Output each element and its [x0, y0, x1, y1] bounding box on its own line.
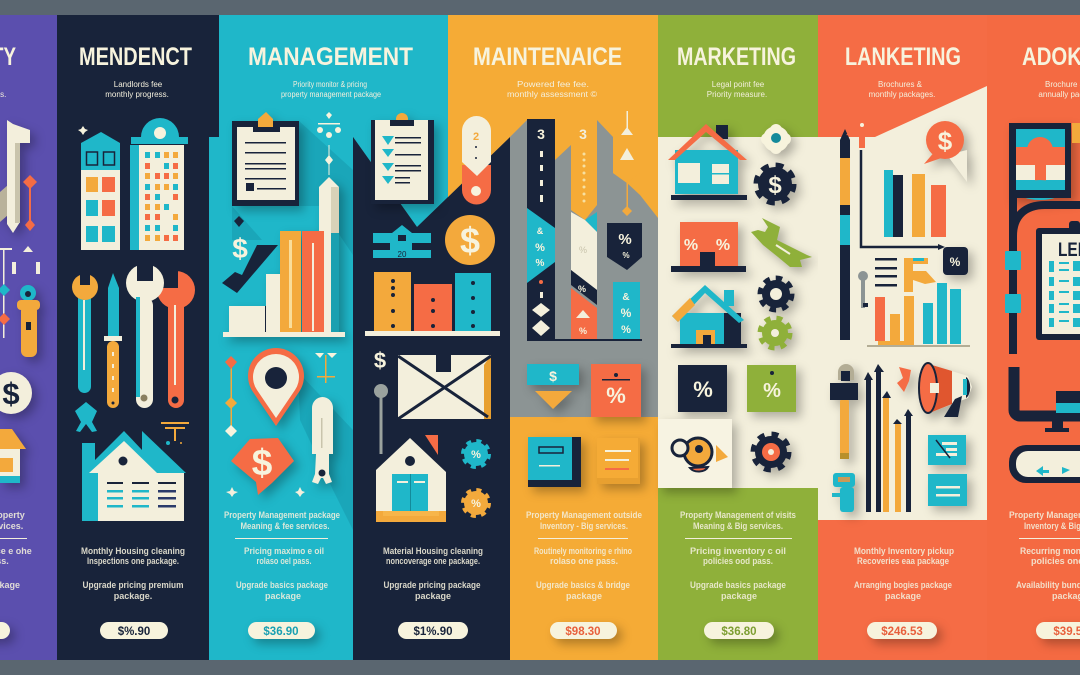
panel: mendenct: [57, 15, 219, 660]
icon: teal gear: [463, 441, 489, 467]
subtext: mendenct: Landlords fee: [114, 80, 163, 89]
price pill: marketing: $36.80: [721, 626, 757, 638]
icon: pencil: [840, 129, 850, 340]
icon: cream card: [658, 419, 732, 488]
icon: right strip: [607, 111, 642, 340]
icon: percent box: %: [606, 383, 626, 408]
icon: right strip: %: [621, 324, 631, 336]
icon: dollar gear: [756, 165, 794, 203]
icon: navy diamond: [234, 216, 244, 227]
heading: management: MANAGEMENT: [248, 43, 413, 71]
icon: navy strip: &: [537, 226, 544, 236]
subtext: lanketing: monthly packages.: [869, 90, 935, 99]
icon: teal tool: [832, 473, 855, 512]
icon: pointer tag: [462, 116, 491, 204]
subtext: adok: [1038, 80, 1080, 99]
subtext: mendenct: [105, 80, 169, 99]
icon: yellow folder: [597, 438, 640, 484]
icon: text lines: [875, 258, 897, 286]
price pill: navy column: $1%.90: [413, 626, 453, 638]
text: maintenance body: rolaso one pass.: [550, 556, 618, 566]
background: cream zone: [658, 137, 818, 488]
icon: teal tag: [527, 364, 579, 409]
icon: map pin: [248, 348, 304, 426]
text: purple column body: [0, 510, 32, 590]
icon: house with door: [376, 435, 446, 522]
icon: teal card upper: [928, 435, 966, 465]
icon: envelope: [398, 355, 491, 419]
icon: clipboard: [232, 112, 299, 206]
icon: dollar coin: $: [2, 376, 20, 411]
icon: key: [0, 120, 30, 233]
icon: teal bank: 20: [398, 250, 407, 259]
text: management body: Pricing maximo e oil: [244, 546, 324, 556]
text: navy body: package: [415, 591, 451, 601]
icon: yellow sign: [161, 422, 189, 445]
text: lanketing body: Arranging bogies package: [854, 580, 952, 590]
text: maintenance body: package: [566, 591, 602, 601]
text: navy body: noncoverage one package.: [386, 556, 480, 566]
icon: green percent tag: [747, 365, 796, 412]
text: maintenance body: [526, 510, 642, 601]
icon: dollar coin: $: [460, 220, 480, 261]
bottom band: [0, 660, 1080, 675]
icon: teal gear: %: [471, 449, 481, 461]
text: management body: Meaning & fee services.: [240, 521, 330, 531]
text: maintenance body: Property Management outside: [526, 510, 642, 520]
price pill: adok: [1036, 622, 1080, 639]
icon: arrows chart: [864, 364, 913, 512]
text: maintenance body: Routinely monitoring e rhino: [534, 546, 632, 556]
subtext: lanketing: Brochures &: [878, 80, 923, 89]
icon: house one: [668, 124, 747, 200]
icon: house three: [671, 285, 747, 348]
subtext: management: Priority monitor & pricing: [293, 80, 367, 89]
icon: dotted line: [0, 246, 40, 338]
bar chart: tower and bars: [223, 177, 345, 337]
subtext: maintenance: [507, 80, 597, 99]
icon: middle strip: %: [579, 326, 587, 336]
price pill: mendenct: $%.90: [118, 626, 150, 638]
icon: right strip: &: [622, 292, 630, 303]
icon: diamond line: [225, 356, 237, 437]
icon: white flower gear: [761, 124, 791, 154]
text: marketing body: Pricing inventory c oil: [690, 546, 786, 556]
icon: navy strip: [527, 119, 555, 340]
icon: percent house: %: [684, 237, 698, 254]
icon: percent house: %: [716, 237, 730, 254]
price pill: management: [248, 622, 315, 639]
icon: yellow tool: [17, 285, 40, 357]
icon: percent house: [671, 222, 746, 272]
icon: hammer: [830, 364, 858, 459]
icon: middle strip: %: [578, 284, 586, 294]
base line: [527, 339, 642, 341]
icon: percent square: %: [950, 255, 961, 269]
icon: dollar pin: $: [374, 348, 386, 373]
text: marketing body: package: [721, 591, 757, 601]
text: marketing body: Upgrade basics package: [690, 580, 786, 590]
icon: teal emblem: [75, 402, 97, 432]
long shadows: management: [232, 121, 353, 530]
panel: maintenance: [448, 15, 658, 660]
icon: house: [0, 429, 26, 483]
panel: navy column with envelope: [353, 113, 510, 660]
text: navy body: [383, 546, 483, 601]
icon: dollar sign: $: [232, 233, 248, 264]
bar chart: three bars: [365, 272, 500, 336]
icon: yellow-teal wrench: [72, 274, 98, 393]
icon: tall building: [130, 118, 188, 250]
icon: right strip: %: [621, 306, 632, 320]
subtext: marketing: Legal point fee: [712, 80, 765, 89]
text: management body: Property Management package: [224, 510, 340, 520]
icon: pointer tag: 2: [473, 131, 479, 143]
icon: right strip: %: [618, 231, 632, 248]
icon: teal tag: $: [549, 368, 557, 384]
text: navy body: Upgrade pricing package: [384, 580, 480, 590]
price pill: management: $36.90: [263, 626, 299, 638]
text: lanketing body: [854, 546, 954, 601]
price pill: mendenct: [100, 622, 168, 639]
subtext: lanketing: [869, 80, 935, 99]
subtext: marketing: [707, 80, 767, 99]
text: navy body: Material Housing cleaning: [383, 546, 483, 556]
text: lanketing body: package: [885, 591, 921, 601]
text: mendenct body: [81, 546, 185, 601]
heading: maintenance: MAINTENAICE: [473, 43, 622, 71]
text: lanketing body: Monthly Inventory pickup: [854, 546, 954, 556]
icon: dollar speech bubble: $: [252, 442, 273, 483]
icon: sparkle: [78, 126, 88, 135]
panel: management: [209, 15, 448, 660]
text: mendenct body: Upgrade pricing premium: [82, 580, 184, 590]
icon: green percent tag: %: [763, 380, 781, 402]
icon: yellow gear: %: [471, 498, 481, 510]
icon: right strip: %: [622, 251, 630, 260]
icon: small tree mark: [315, 353, 337, 383]
icon: large house: [82, 431, 186, 521]
icon: middle strip: [571, 120, 597, 340]
icon: dollar pin: [374, 348, 388, 454]
icon: yellow gear: [463, 490, 489, 516]
panel: marketing: [658, 15, 818, 660]
price pill: purple column: [0, 622, 10, 639]
icon: green wrench: [751, 218, 812, 267]
text: maintenance body: Upgrade basics & bridge: [536, 580, 630, 590]
text: marketing body: [680, 510, 796, 601]
icon: yellow F mark: [904, 258, 936, 292]
text: management body: [224, 510, 340, 601]
text: mendenct body: Monthly Housing cleaning: [81, 546, 185, 556]
icon: key: [858, 271, 868, 308]
icon: arrow slider: [1009, 445, 1080, 483]
icon: arrow up: [222, 245, 278, 293]
icon: screwdriver: [104, 273, 122, 408]
subtext: management: property management package: [281, 90, 381, 99]
icon: percent square: [943, 247, 968, 275]
text: management body: rolaso oel pass.: [256, 556, 312, 566]
background: grey zone: [510, 120, 658, 417]
icon: navy percent tag: %: [693, 377, 713, 402]
heading: mendenct: MENDENCT: [79, 43, 192, 71]
bar chart: upper: [861, 150, 946, 250]
icon: dollar coin: [445, 215, 495, 265]
panel: adok: [987, 15, 1080, 660]
icon: navy percent tag: [678, 365, 727, 412]
icon: percent box: [591, 364, 641, 417]
subtext: maintenance: monthly assessment ©: [507, 90, 597, 99]
icon: green gear: [760, 318, 790, 348]
bar chart: lower: [867, 283, 970, 347]
icon: coral arrow: [846, 123, 875, 148]
icon: navy strip: %: [536, 258, 545, 269]
text: adok body: [1009, 510, 1080, 601]
icon: teal bank: [373, 225, 431, 259]
icon: small building: [81, 132, 120, 250]
subtext: management: [281, 80, 381, 99]
heading: lanketing: LANKETING: [845, 43, 961, 71]
icon: navy strip: 3: [537, 126, 545, 142]
price pill: lanketing: [867, 622, 937, 639]
icon: coral gear: [753, 434, 789, 470]
heading: marketing: MARKETING: [677, 43, 796, 71]
icon: coral wrench: [157, 262, 195, 408]
price pill: navy column: [398, 622, 468, 639]
icon: middle strip: %: [579, 245, 587, 255]
icon: navy gear: [760, 278, 792, 310]
icon: navy strip: %: [535, 242, 545, 254]
price pill: maintenance: $98.30: [565, 626, 601, 638]
icon: spanner: [312, 397, 333, 484]
background: cream zone: [818, 86, 987, 520]
text: marketing body: Meaning & Big services.: [693, 521, 783, 531]
panel: purple column: [0, 15, 57, 660]
text: marketing body: policies ood pass.: [703, 556, 773, 566]
icon: teal card lower: [928, 474, 967, 506]
panel: lanketing: [818, 15, 987, 660]
icon: sparkles: [226, 487, 305, 497]
icon: dollar coin: [0, 372, 32, 414]
text: marketing body: Property Management of visits: [680, 510, 796, 520]
text: management body: package: [265, 591, 301, 601]
text: mendenct body: Inspections one package.: [87, 556, 179, 566]
icon: yellow corner: [1072, 123, 1080, 143]
subtext: mendenct: monthly progress.: [105, 90, 169, 99]
icon: dollar gear: $: [768, 172, 782, 199]
icon: framed picture: [1009, 123, 1071, 200]
icon: megaphone: [897, 363, 972, 417]
icon: dollar speech bubble: $: [938, 126, 953, 156]
text: maintenance body: Inventory - Big services.: [540, 521, 628, 531]
price pill: lanketing: $246.53: [881, 626, 923, 638]
icon: ornament: [317, 112, 341, 175]
icon: dollar speech bubble: [231, 438, 294, 495]
text: management body: Upgrade basics package: [236, 580, 328, 590]
icon: teal folder: [528, 437, 581, 487]
text: lanketing body: Recoveries eaa package: [857, 556, 949, 566]
icon: dollar speech bubble: [924, 121, 967, 182]
icon: lease clipboard: [1036, 221, 1080, 340]
icon: teal tabs: [1005, 251, 1021, 313]
price pill: maintenance: [550, 622, 617, 639]
icon: cream wrench: [126, 264, 164, 408]
icon: navy frame: [1013, 198, 1080, 354]
price pill: marketing: [704, 622, 774, 639]
icon: monitor: [1014, 367, 1080, 432]
subtext: maintenance: Powered fee fee.: [517, 80, 589, 89]
text: mendenct body: package.: [114, 591, 152, 601]
subtext: marketing: Priority measure.: [707, 90, 767, 99]
icon: middle strip: 3: [579, 126, 587, 142]
icon: checklist clipboard: [371, 113, 434, 204]
icon: orange markers: [23, 175, 37, 231]
